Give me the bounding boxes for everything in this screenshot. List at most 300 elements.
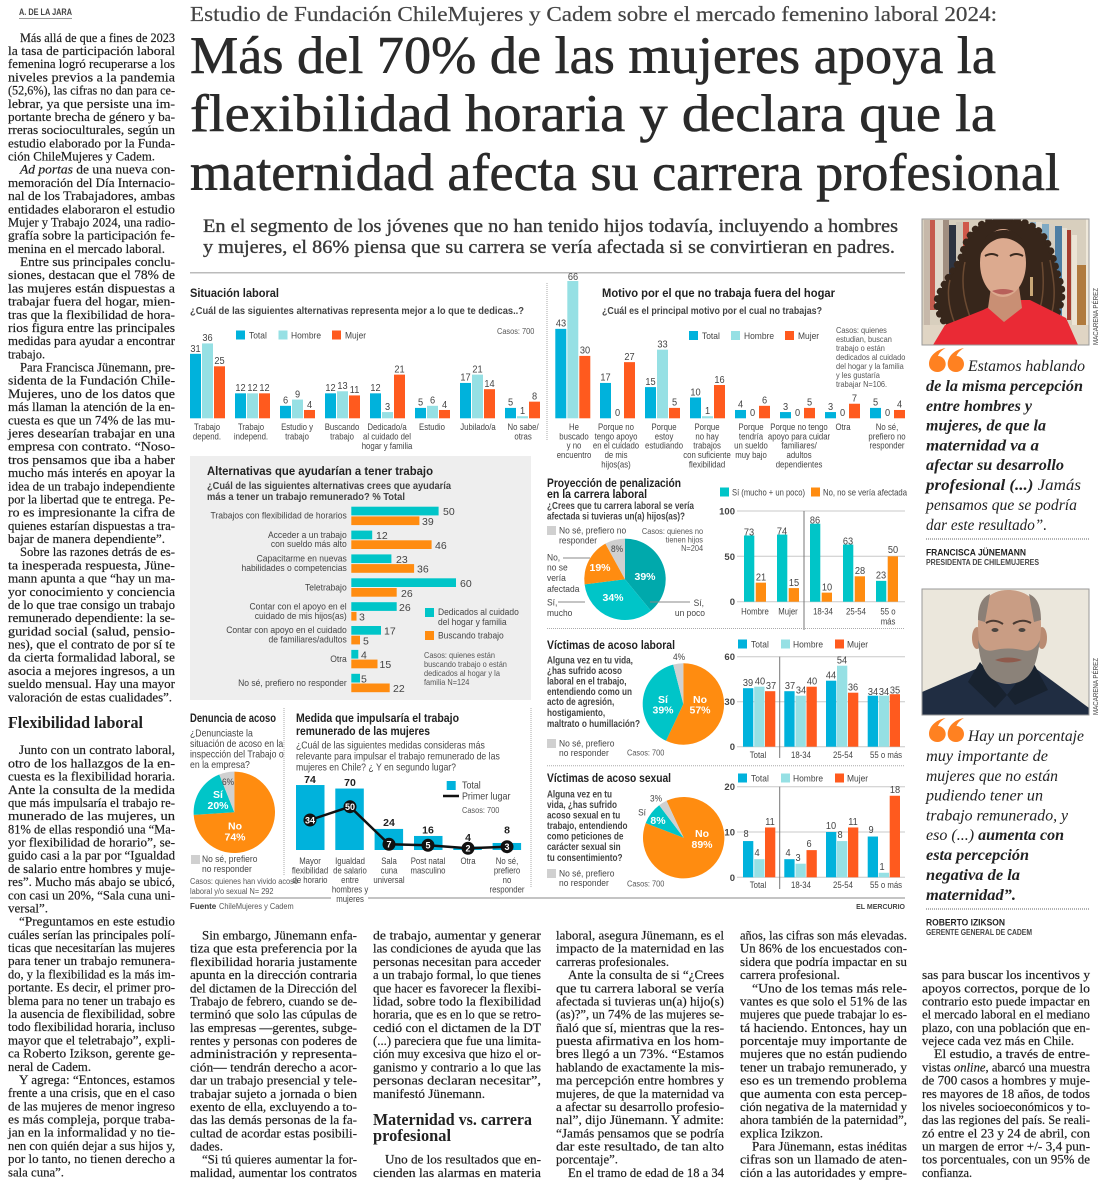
chart heading	[602, 288, 835, 317]
body column 1 bottom: es más compleja, porque traba-	[8, 1112, 175, 1126]
values: 14	[484, 379, 495, 390]
photo credit: MACARENA PÉREZ	[1091, 658, 1100, 715]
bar values: 74	[304, 774, 316, 786]
category labels: al cuidado del	[363, 431, 411, 442]
bar values: 36	[417, 564, 429, 576]
category labels: Total	[750, 749, 766, 760]
values: 34	[796, 685, 807, 697]
body column 1 bottom: res”. Mucho más abajo se ubicó,	[8, 874, 175, 889]
body column 1 top: Mujer y Trabajo 2024, una radio-	[8, 214, 175, 230]
chart: Situación laboral	[190, 288, 540, 451]
category labels: estudiando	[645, 440, 683, 451]
body column 5: Para Jünemann, estas inéditas	[752, 1138, 907, 1154]
body column 1 top: (52,6%), las cifras no dan para ce-	[8, 83, 175, 98]
body column 6	[922, 967, 1091, 1180]
category labels: depend.	[193, 431, 221, 442]
body column 4: puesta afirmativa en los hom-	[556, 1033, 724, 1048]
category labels: Porque	[694, 421, 720, 432]
category labels: Jubilado/a	[460, 421, 496, 432]
deck	[203, 217, 898, 258]
chart: Víctimas de acoso laboral	[547, 639, 905, 760]
body column 1 bottom: que más impulsaría el trabajo re-	[8, 795, 175, 810]
bar legend: Mujer	[847, 773, 868, 784]
photo credit: MACARENA PÉREZ	[1091, 288, 1100, 345]
body column 6: das las regiones del país. Se reali-	[922, 1112, 1090, 1127]
body column 1 bottom: Y agrega: “Entonces, estamos	[19, 1072, 175, 1087]
bars	[555, 281, 905, 418]
category labels: prefiero no	[868, 431, 906, 441]
category labels: trabajo	[330, 431, 354, 442]
body column 1 bottom: por lo tanto, no tienen derecho a	[8, 1151, 175, 1166]
values: 44	[826, 670, 837, 682]
values: 10	[690, 387, 701, 399]
body column 1 bottom: yor flexibilidad de horario”, se-	[8, 834, 175, 850]
body column 1 top: tras que la flexibilidad de hora-	[8, 307, 175, 322]
body column 2: apunta en la dirección contraria	[190, 967, 357, 982]
category labels: No sé,	[876, 421, 898, 432]
values: 7	[852, 393, 857, 405]
axis: 0	[730, 873, 735, 884]
pie: 89%	[691, 839, 713, 851]
values: 18	[890, 785, 901, 796]
pie: 39%	[634, 571, 656, 583]
legend: Buscando trabajo	[438, 630, 504, 641]
category labels: Total	[750, 879, 766, 890]
body column 6: confianza.	[922, 1165, 972, 1180]
axis	[724, 652, 905, 758]
pie	[638, 793, 724, 878]
body column 1 top: nal de los Trabajadores, ambas	[8, 188, 175, 203]
note	[424, 651, 507, 687]
subheading: Maternidad vs. carrera profesional: profesional	[373, 1126, 451, 1145]
bar values	[359, 506, 472, 695]
body column 1 bottom: cuesta es la flexibilidad horaria.	[8, 769, 175, 784]
body column 2: Trabajo de febrero, cuando se de-	[190, 994, 357, 1008]
subheading: Maternidad vs. carrera profesional: Maternidad vs. carrera	[373, 1110, 532, 1129]
category labels: y no	[567, 440, 582, 451]
values: 9	[868, 825, 874, 836]
category labels: trabajos	[693, 440, 721, 451]
pie	[194, 772, 275, 853]
values: 4	[754, 848, 760, 859]
body column 2: malidad, aumentar los contratos	[190, 1165, 357, 1180]
body column 4: carreras profesionales.	[556, 954, 669, 969]
bar values: 12	[376, 530, 388, 542]
bar labels: con sueldo más alto	[271, 539, 347, 549]
category labels: 25-54	[833, 879, 853, 890]
legend: del hogar y familia	[438, 617, 507, 627]
note: familia N=124	[424, 678, 470, 687]
category labels: universal	[373, 874, 405, 885]
category labels	[193, 421, 539, 451]
body column 2: rentes y personas con poderes de	[190, 1033, 357, 1048]
bars	[296, 785, 521, 850]
body column 4: afectada si tuvieras un(a) hijo(s)	[556, 994, 724, 1008]
body column 1 top: jeres desearían trabajar en una	[7, 426, 175, 440]
category labels: independ.	[234, 431, 268, 442]
category labels: cuna	[381, 865, 398, 876]
body column 3: las condiciones de ayuda que las	[373, 941, 541, 956]
body column 3: personas necesitan para acceder	[373, 954, 542, 969]
values: 21	[756, 572, 767, 584]
pie labels: Sí,	[694, 598, 704, 608]
body column 1 top: idea de un trabajo independiente	[8, 478, 175, 493]
body column 1 top: Ad portas de una nueva con-	[19, 162, 175, 177]
body column 5: porcentaje muy importante de	[740, 1033, 907, 1048]
legend	[547, 738, 665, 758]
axis: 10	[724, 828, 735, 838]
chart heading	[547, 773, 671, 863]
body column 5: “Uno de los temas más rele-	[752, 980, 907, 995]
values: 37	[766, 681, 776, 692]
values: 0	[750, 408, 756, 419]
body column 1 top: medidas para ayudar a encontrar	[8, 333, 176, 348]
values: 3	[828, 402, 834, 413]
pie: 39%	[652, 704, 674, 716]
values: 4	[897, 399, 903, 411]
legend: No sé, prefiero	[559, 738, 614, 749]
chart heading: ¿Cuál es el principal motivo por el cual no trabajas?	[602, 306, 822, 317]
axis: 60	[724, 652, 735, 663]
pie	[643, 652, 724, 745]
legend	[547, 525, 626, 546]
body column 6: los niveles socioeconómicos y to-	[922, 1099, 1090, 1114]
photo frame	[922, 219, 1089, 345]
body column 1 bottom: do, y la flexibilidad es la más im-	[8, 966, 175, 981]
body column 6: res mayores de 18 años, de todos	[922, 1086, 1090, 1101]
values: 12	[259, 383, 270, 394]
bar legend: Total	[751, 639, 769, 650]
body column 5: carrera profesional.	[740, 967, 840, 982]
chart heading	[296, 713, 500, 773]
values: 5	[672, 397, 678, 409]
note: dedicados al cuidado	[836, 353, 906, 362]
quote mark	[929, 718, 964, 742]
body column 1 bottom: guido casi a la par por “Igualdad	[8, 848, 175, 863]
body column 3: (...) pareciera que fue una limita-	[373, 1033, 541, 1048]
bar values: 26	[401, 588, 413, 600]
attribution: Francisca Jünemann: FRANCISCA JÜNEMANN	[926, 548, 1026, 558]
quote: Francisca Jünemann	[924, 358, 1085, 534]
bar values: 39	[422, 516, 434, 528]
bar legend: Mujer	[847, 639, 868, 650]
note: Casos: quienes están	[424, 651, 495, 660]
body column 2: del dictamen de la Dirección del	[190, 980, 357, 995]
legend	[689, 331, 819, 341]
values: 36	[848, 682, 859, 694]
note: N=204	[681, 544, 704, 553]
chart heading	[190, 288, 524, 317]
legend	[425, 607, 519, 641]
bar values: 4	[361, 650, 367, 662]
legend: no responder	[202, 864, 252, 874]
values: 21	[472, 364, 483, 376]
body column 4: Ante la consulta de si “¿Crees	[568, 967, 724, 982]
body column 2: dades.	[190, 1138, 223, 1154]
body column 4: dar este resultado, de tan alto	[556, 1138, 724, 1154]
body column 1 bottom: neral de Cadem.	[8, 1059, 91, 1074]
legend: Casos: 700	[627, 748, 665, 758]
chart: Motivo por el que no trabaja	[555, 272, 906, 469]
chart heading: ¿Cuál de las siguientes alternativas representa mejor a lo que te dedicas..?	[190, 306, 524, 317]
category labels: Buscando	[325, 421, 359, 432]
category labels: encuentro	[557, 449, 591, 460]
legend	[191, 854, 257, 874]
category labels: tengo apoyo	[595, 431, 638, 441]
title: flexibilidad horaria y declara que la	[190, 85, 996, 143]
note	[836, 326, 906, 389]
legend: no responder	[559, 748, 609, 758]
values: 5	[873, 397, 879, 409]
category labels: Porque	[738, 421, 764, 432]
body column 1 top	[7, 30, 176, 704]
values: 27	[624, 352, 635, 363]
body column 4: bres llegó a un 73%. “Estamos	[556, 1046, 724, 1061]
category labels: Porque no tengo	[770, 421, 828, 432]
body column 6: apoyos correctos, porque de lo	[922, 980, 1090, 995]
chart heading: ¿Cuál de las siguientes medidas consideras más	[296, 740, 485, 751]
quote: Roberto Izikson: eso (...) aumenta con	[926, 827, 1064, 844]
body column 1 bottom: munerado de las mujeres, un	[8, 808, 176, 823]
category labels: 55 o	[880, 606, 896, 617]
body column 3	[373, 928, 542, 1101]
values: 8	[837, 830, 843, 841]
chart heading: Víctimas de acoso laboral	[547, 640, 675, 652]
panel: Alternativas que ayudarían a tener trabajo	[190, 456, 531, 700]
bar legend: Hombre	[793, 639, 823, 650]
values: 10	[826, 821, 837, 832]
chart: Proyección de penalización	[547, 478, 908, 630]
legend: Total	[702, 331, 720, 341]
credit: EL MERCURIO	[856, 904, 906, 911]
category labels: Hombre	[741, 606, 769, 617]
bar legend: Hombre	[793, 773, 823, 784]
values	[743, 785, 901, 873]
category labels: Mayor	[299, 855, 321, 866]
values: 37	[785, 681, 795, 692]
chart heading	[190, 713, 284, 770]
body column 1 bottom: ca Roberto Izikson, gerente ge-	[8, 1046, 175, 1061]
body column 1 top: niveles previos a la pandemia	[8, 69, 175, 84]
bar values: 8	[504, 824, 510, 836]
body column 1 top: yor conocimiento y conciencia	[8, 584, 175, 599]
note: Casos: quienes no	[642, 527, 704, 536]
body column 1 top: Sobre las razones detrás de es-	[20, 544, 175, 559]
body column 1 top: estudio elaborado por la Funda-	[8, 135, 175, 150]
category labels: dependientes	[776, 459, 823, 469]
legend: responder	[559, 535, 597, 546]
values: 34	[879, 687, 890, 698]
legend: Mujer	[345, 330, 366, 341]
note: trabajar N=106.	[836, 380, 887, 389]
body column 1 top: portante brecha de género y ba-	[8, 109, 175, 124]
legend: No sé, prefiero	[202, 854, 257, 864]
values: 73	[744, 527, 755, 539]
chart heading: vida, ¿has sufrido	[547, 799, 617, 810]
category labels: con suficiente	[683, 449, 731, 460]
category labels: trabajo	[285, 431, 309, 442]
category labels: He	[569, 421, 579, 432]
body column 5: ción negativa de la maternidad y	[740, 1099, 907, 1114]
pie: 20%	[207, 800, 229, 812]
axis: 0	[730, 742, 735, 753]
legend: Sí (mucho + un poco)	[732, 488, 805, 498]
body column 1 bottom: Ante la consulta de la medida	[8, 782, 175, 797]
values: 74	[777, 526, 788, 538]
category labels: más	[881, 616, 896, 627]
body column 1 top: sidenta de la Fundación Chile-	[8, 373, 175, 388]
body column 1 bottom: Junto con un contrato laboral,	[19, 742, 175, 757]
chart heading: Motivo por el que no trabaja fuera del hogar	[602, 288, 835, 300]
values: 3	[385, 402, 391, 413]
bar values: 3	[359, 612, 365, 624]
body column 1 bottom: portante. Es decir, el primer pro-	[8, 980, 175, 995]
bar labels: habilidades o competencias	[241, 563, 347, 573]
chart: Denuncia de acoso	[190, 713, 298, 896]
category labels: No sabe/	[507, 421, 539, 432]
bar values: 24	[383, 817, 395, 829]
body column 6: plazo, con una población que en-	[922, 1020, 1090, 1035]
body column 5: vantes es que solo el 51% de las	[740, 994, 907, 1008]
body column 2: dar un trabajo presencial y tele-	[190, 1073, 357, 1088]
photo: Roberto Izikson	[922, 589, 1089, 715]
deck: y mujeres, el 86% piensa que su carrera se vería afectada si se convirtieran en padres.	[203, 238, 895, 258]
values: 66	[568, 272, 579, 283]
values	[556, 272, 903, 419]
note: buscando trabajo o están	[424, 660, 507, 669]
subheading: Maternidad vs. carrera profesional	[373, 1110, 532, 1145]
legend: Primer lugar	[462, 791, 510, 803]
category labels: Sala	[381, 855, 397, 866]
pie labels: un poco	[675, 608, 705, 618]
category labels: 18-34	[791, 879, 811, 890]
values: 11	[765, 817, 775, 828]
category labels: 55 o más	[870, 749, 903, 760]
quote: Francisca Jünemann: Estamos hablando	[967, 358, 1085, 375]
body column 1 bottom: de salario entre hombres y muje-	[8, 861, 175, 876]
category labels: de horario	[293, 874, 328, 885]
body column 1 top: mucho más interés en apoyar la	[8, 465, 175, 480]
bar labels: Capacitarme en nuevas	[257, 553, 347, 564]
category labels: muy bajo	[735, 449, 767, 460]
chart heading: ¿Denunciaste la	[190, 728, 254, 739]
values: 4	[738, 399, 744, 411]
body column 5: cifras son un llamado de aten-	[740, 1152, 907, 1167]
body column 1 top: memoración del Día Internacio-	[8, 175, 175, 190]
values: 9	[295, 389, 301, 401]
body column 1 top: remunerado dependiente: la se-	[8, 610, 175, 625]
line: primer lugar: 5	[425, 841, 431, 851]
bar values: 4	[465, 832, 471, 844]
title	[190, 27, 1060, 202]
legend: Casos: 700	[627, 879, 665, 889]
values: 23	[876, 570, 887, 582]
bar labels: No sé, prefiero no responder	[238, 677, 347, 688]
axis: 0	[730, 597, 735, 608]
body column 2: das las demás personas de la fa-	[190, 1112, 357, 1127]
category labels: de salario	[333, 865, 367, 876]
body column 6: contrario esto puede impactar en	[922, 994, 1090, 1008]
bar values: 5	[361, 674, 367, 686]
pie: 3%	[650, 793, 662, 804]
body column 1 bottom: otro de los hallazgos de la en-	[8, 755, 175, 770]
category labels: adultos	[787, 449, 812, 460]
quote: Roberto Izikson	[925, 728, 1084, 904]
values: 63	[843, 536, 854, 548]
chart heading: trabajo, entendiendo	[547, 820, 628, 831]
note: tienen hijos	[666, 535, 703, 545]
chart heading: Alguna vez en tu	[547, 789, 612, 800]
values: 12	[235, 383, 246, 394]
values: 8	[532, 391, 538, 403]
chart heading: Proyección de penalización	[547, 478, 681, 490]
category labels: tendría	[739, 431, 763, 441]
body column 1 top: lebrar, ya que persiste una im-	[8, 96, 175, 111]
chart: Víctimas de acoso sexual	[547, 773, 905, 890]
subheading: Flexibilidad laboral: Flexibilidad laboral	[8, 713, 143, 732]
body column 1 top: rreras socioculturales, según un	[8, 122, 176, 137]
values: 25	[214, 356, 225, 367]
bar values: 50	[443, 506, 455, 518]
axis: 50	[724, 552, 735, 563]
body column 1 bottom: con casi un 20%, “Sala cuna uni-	[8, 887, 175, 902]
category labels: hogar y familia	[362, 440, 412, 451]
bar values	[304, 774, 510, 844]
body column 2: trabajar sujeto a jornada o bien	[190, 1086, 358, 1101]
category labels: 18-34	[791, 749, 811, 760]
category labels: flexibilidad	[689, 459, 725, 469]
body column 1 top: asocia a mejores ingresos, a un	[8, 663, 176, 678]
category labels: en el cuidado	[593, 440, 639, 451]
body column 2: “Si tú quieres aumentar la for-	[202, 1152, 357, 1167]
body column 4: a afectar su desarrollo profesio-	[556, 1099, 724, 1114]
body column 1 bottom: todo flexibilidad horaria, incluso	[8, 1019, 175, 1034]
line: primer lugar: 3	[504, 842, 510, 852]
body column 1 bottom: 81% de ellas respondió una “Ma-	[8, 821, 175, 836]
values	[744, 515, 899, 594]
category labels: entre	[341, 874, 359, 885]
chart heading: relevante para impulsar el trabajo remunerado de las	[296, 751, 500, 762]
body column 3 end	[373, 1152, 541, 1180]
body column 3: personas declaran necesitar”,	[373, 1073, 541, 1088]
bars	[743, 796, 900, 877]
chart heading: afectada si tuvieras un(a) hijos(as)?	[547, 512, 685, 522]
chart heading: Alguna vez en tu vida,	[547, 655, 633, 666]
pie: No	[228, 820, 242, 832]
body column 2: tiza que esta preferencia por la	[190, 941, 357, 956]
body column 1 top: menina en el mercado laboral.	[8, 241, 165, 256]
chart heading: en la carrera laboral	[547, 489, 647, 501]
values: 4	[785, 848, 791, 859]
chart: Medida que impulsaría el trabajo	[292, 713, 525, 904]
bar labels: cuidado de mis hijos(as)	[255, 610, 347, 621]
body column 3 end: Uno de los resultados que en-	[385, 1152, 541, 1167]
body column 1 bottom: sala cuna”.	[8, 1164, 64, 1179]
attribution: Roberto Izikson: GERENTE GENERAL DE CADEM	[926, 928, 1032, 937]
body column 4: ma percepción entre hombres y	[556, 1073, 725, 1088]
chart heading	[547, 640, 675, 730]
body column 1 bottom: para tener un trabajo remunera-	[8, 953, 175, 968]
body column 1 top: sueldo mensual. Hay una mayor	[8, 676, 176, 691]
category labels: responder	[869, 440, 905, 451]
body column 2	[190, 928, 358, 1180]
quote mark	[929, 348, 964, 372]
values: 0	[840, 408, 846, 419]
body column 1 bottom: versal”.	[8, 900, 48, 916]
legend: Dedicados al cuidado	[438, 607, 519, 617]
pie labels: afectada	[547, 584, 579, 594]
body column 2: administración y representa-	[190, 1046, 357, 1061]
